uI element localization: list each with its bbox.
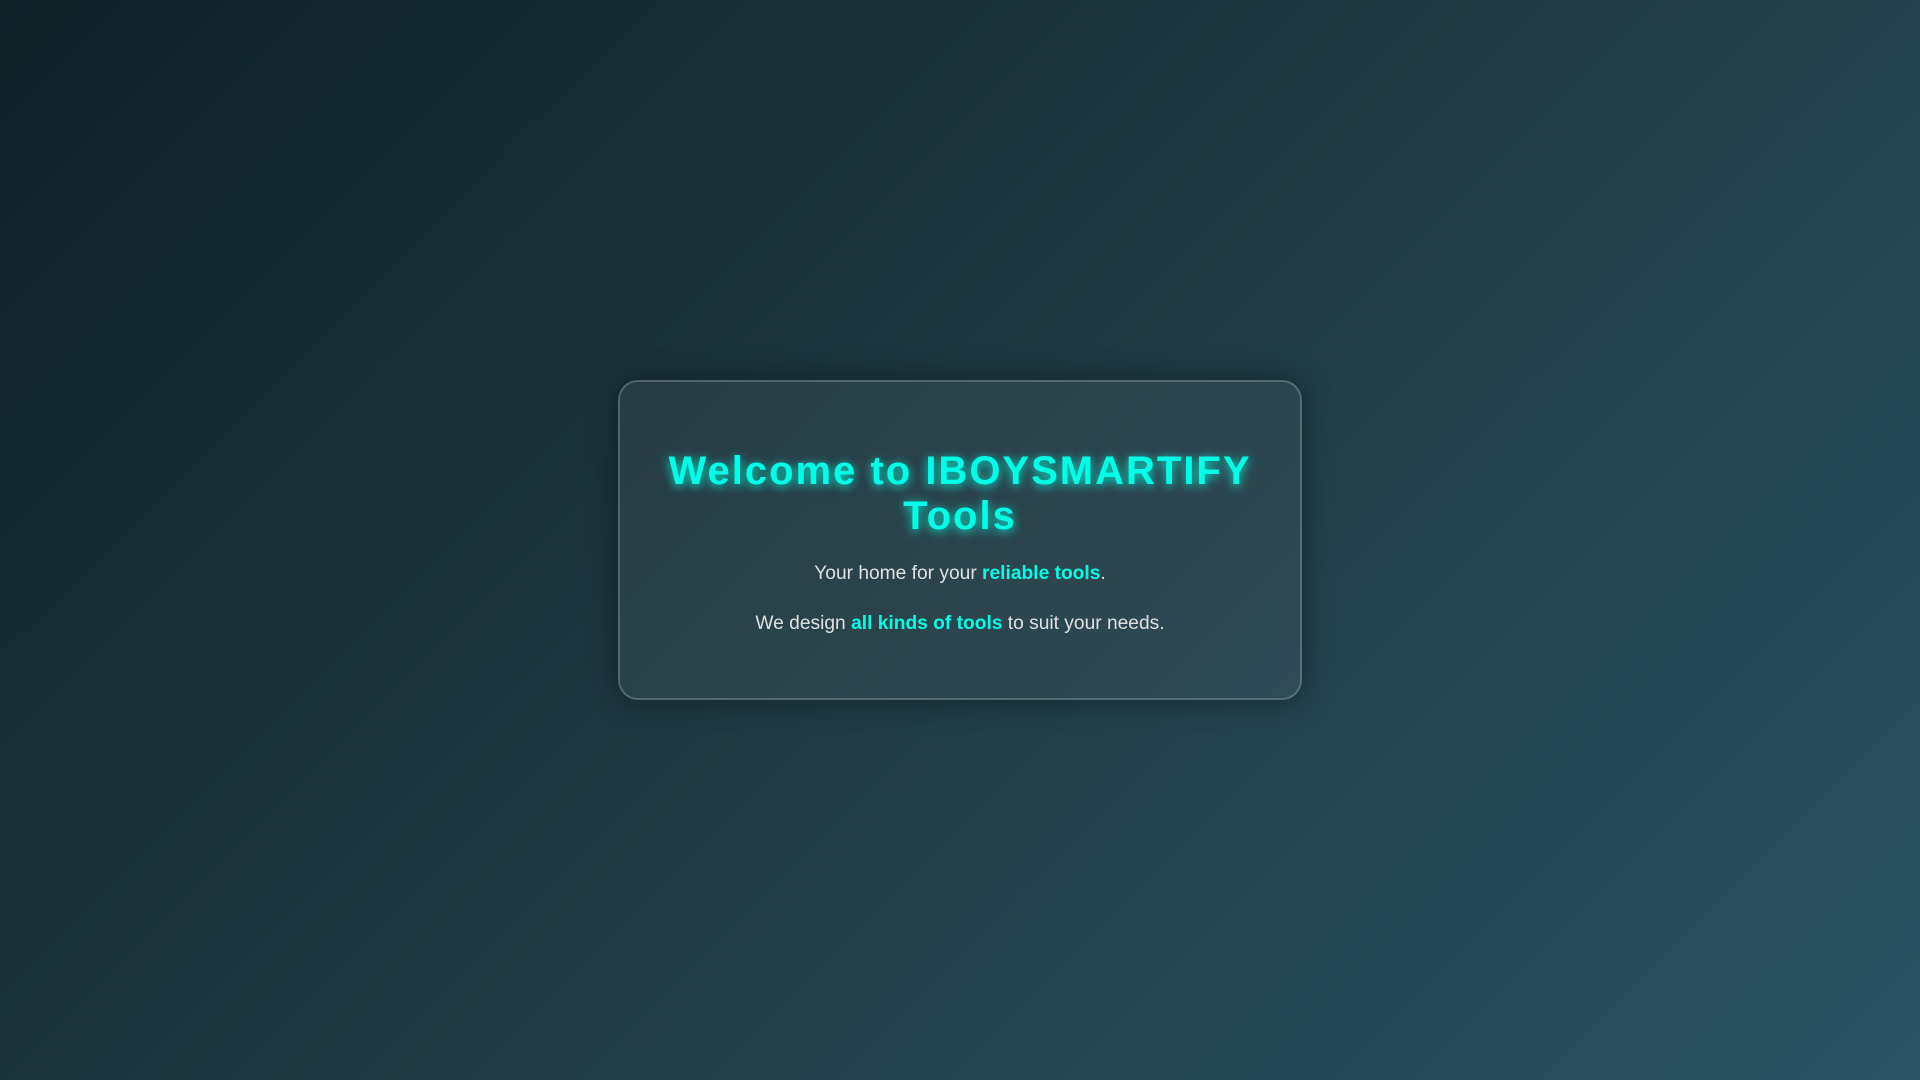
text: tagline: Your home for your reliable tools. [814, 563, 1106, 584]
text: description: We design all kinds of tools to suit your needs. [755, 613, 1165, 634]
title: Welcome to IBOYSMARTIFY Tools [668, 449, 1252, 538]
panel: welcome card [618, 380, 1302, 700]
